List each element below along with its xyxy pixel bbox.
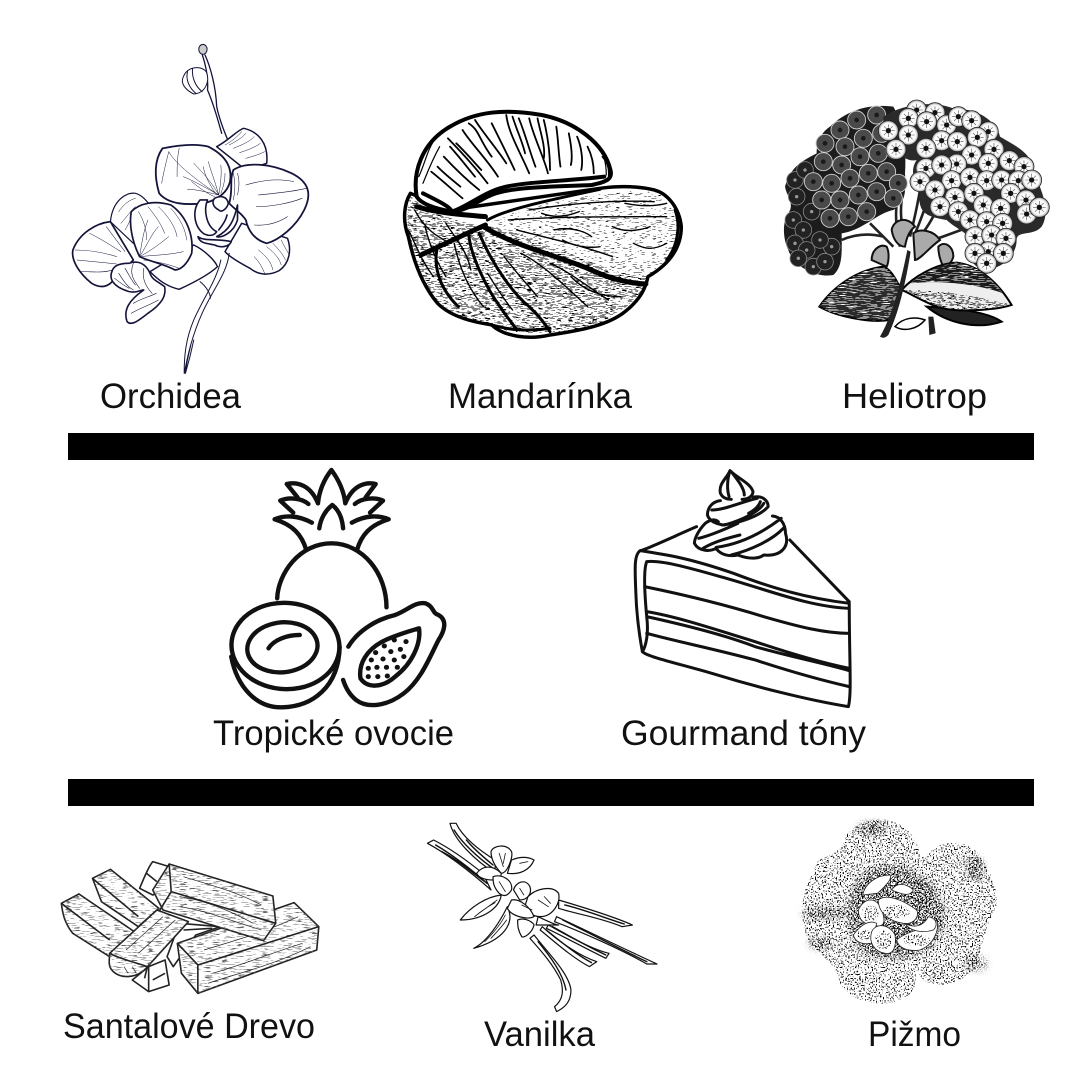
orchid main flower (156, 128, 308, 274)
vanilla flowers and leaves (460, 846, 559, 948)
label: Vanilka: Vanilka (484, 1015, 596, 1054)
mandarin shading (408, 197, 648, 333)
musk dense shading (802, 822, 987, 970)
panel: top row notes (73, 44, 1049, 416)
whipped cream (694, 471, 787, 558)
large lower stick (177, 903, 319, 993)
label: Tropické ovocie: Tropické ovocie (213, 714, 454, 753)
heliotrope small leaves (872, 220, 953, 267)
panel: bottom row notes (61, 819, 997, 1054)
icon: mandarin segments (405, 112, 681, 337)
front stick (109, 910, 188, 978)
label: Santalové Drevo: Santalové Drevo (63, 1007, 315, 1046)
cake body (635, 527, 850, 707)
coconut (219, 593, 352, 707)
label: Gourmand tóny: Gourmand tóny (621, 714, 866, 753)
heliotrope dark cluster (784, 106, 907, 276)
orchid second flower (73, 193, 218, 323)
heliotrope large leaves (819, 250, 1012, 338)
divider bar: top (68, 433, 1034, 460)
mandarin segment lines (417, 207, 646, 284)
pineapple (275, 470, 389, 607)
icon: musk flower (802, 819, 997, 1003)
orchid stem and buds (182, 44, 227, 138)
papaya (343, 603, 444, 705)
icon: heliotrope (784, 100, 1049, 338)
musk petal inner stipple (857, 905, 930, 949)
heliotrope light cluster (878, 100, 1049, 273)
heliotrope stems (842, 190, 970, 247)
back sticks (61, 862, 220, 992)
icon: vanilla (427, 823, 657, 1012)
musk rose centre (853, 875, 938, 954)
musk petals stipple (802, 819, 997, 1003)
mandarin body (405, 187, 681, 337)
panel: middle row notes (213, 470, 866, 753)
label: Mandarínka: Mandarínka (448, 377, 633, 416)
icon: cake slice (635, 471, 850, 707)
orchid long stem (184, 253, 229, 373)
icon: sandalwood sticks (61, 862, 319, 993)
label: Orchidea: Orchidea (100, 377, 242, 416)
divider bar: bottom (68, 779, 1034, 806)
vanilla beans (427, 823, 657, 1012)
icon: tropical fruit (219, 470, 444, 707)
large upper stick (153, 864, 276, 941)
icon: orchid (73, 44, 308, 373)
mandarin top segment (416, 112, 611, 212)
label: Heliotrop: Heliotrop (842, 377, 987, 416)
label: Pižmo: Pižmo (868, 1015, 961, 1054)
